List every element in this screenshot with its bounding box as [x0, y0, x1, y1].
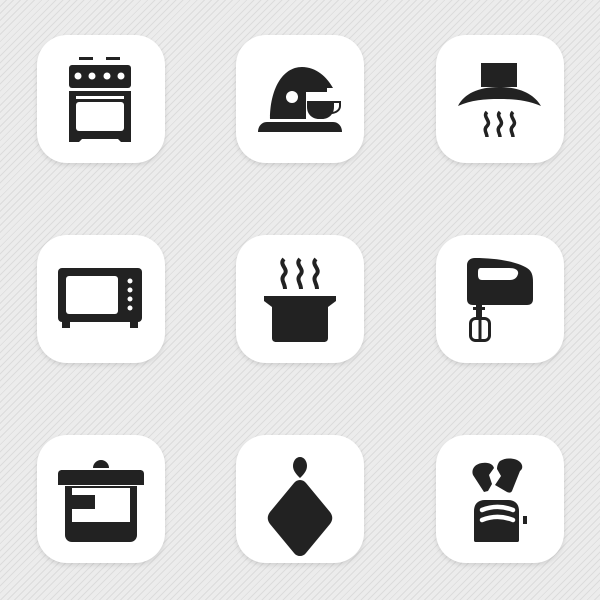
icon card: cooker hood — [436, 35, 564, 163]
icon card: pot holder — [236, 435, 364, 563]
icon card: microwave oven — [37, 235, 165, 363]
icon card: coffee maker — [236, 35, 364, 163]
icon card: toaster — [436, 435, 564, 563]
icon card: steaming pot — [236, 235, 364, 363]
icon card: hand mixer — [436, 235, 564, 363]
icon card: rice cooker — [37, 435, 165, 563]
icon card: gas stove — [37, 35, 165, 163]
